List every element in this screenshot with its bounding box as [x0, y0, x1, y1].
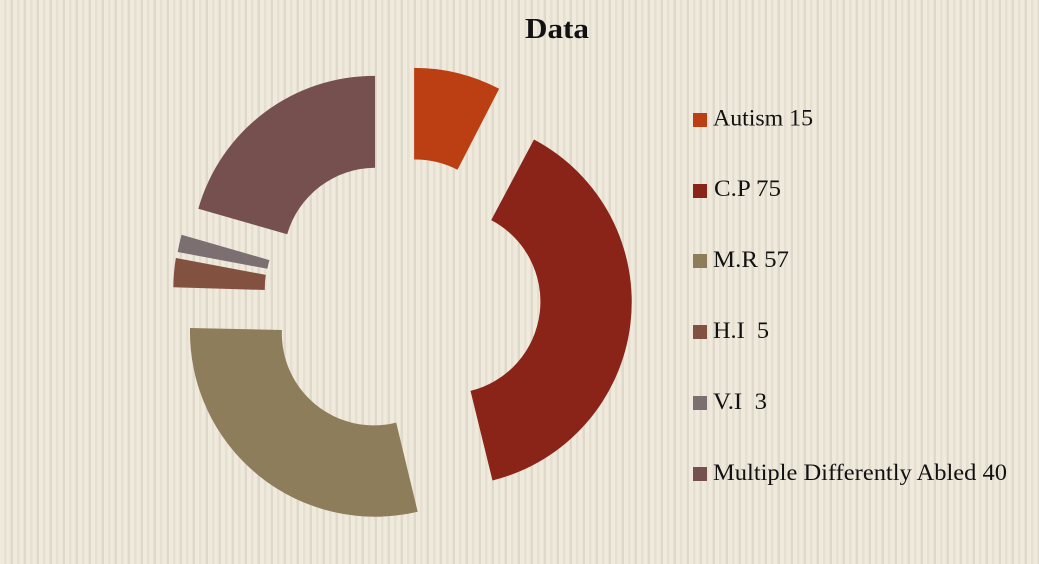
- slice: M.R 57: [190, 328, 418, 517]
- donut chart: [173, 68, 632, 517]
- slice: Autism 15: [414, 68, 499, 170]
- slice: Multiple Differently Abled 40: [198, 76, 375, 234]
- legend item: V.I: [693, 389, 767, 414]
- legend item: M.R: M.R 57: [713, 247, 789, 272]
- title: Data: [525, 14, 589, 45]
- legend item: Autism: Autism 15: [713, 106, 813, 130]
- slice: H.I 5: [173, 258, 266, 290]
- legend item: C.P: C.P 75: [714, 176, 781, 201]
- legend: [693, 106, 1007, 485]
- slice: C.P 75: [470, 140, 632, 480]
- legend item: V.I: V.I 3: [713, 389, 767, 414]
- legend item: Multiple Differently Abled: Multiple Differently Abled 40: [713, 460, 1007, 485]
- slice: V.I 3: [178, 235, 269, 269]
- legend item: H.I: [693, 318, 769, 343]
- legend item: H.I: H.I 5: [713, 318, 769, 343]
